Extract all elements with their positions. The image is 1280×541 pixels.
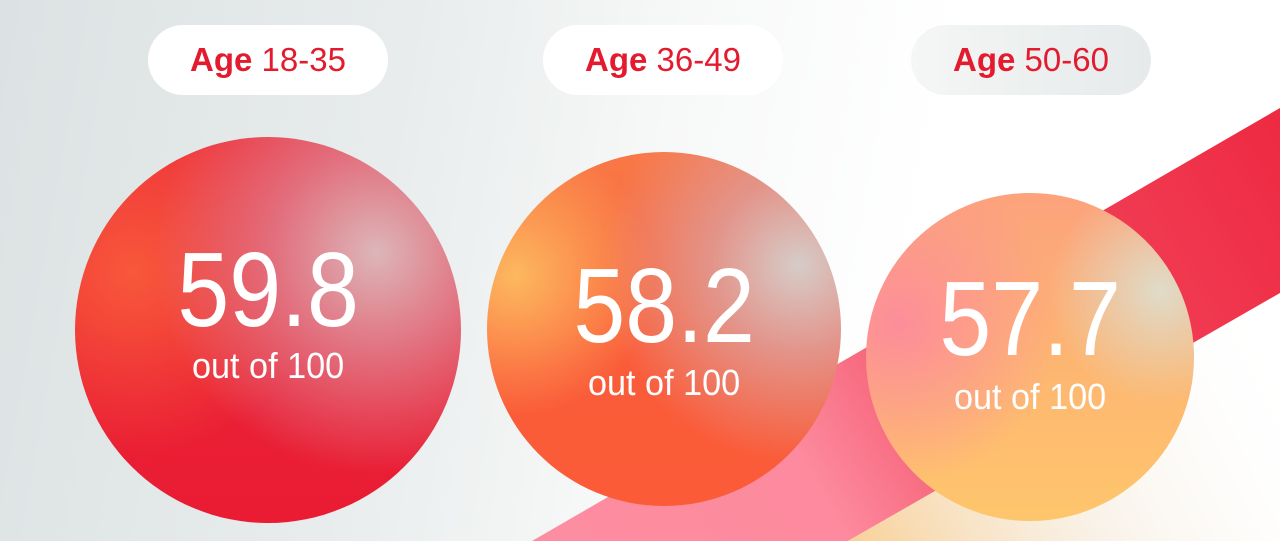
circle: 57.7 xyxy=(866,193,1194,521)
pill: Age 36-49: Age 36-49 xyxy=(585,41,741,78)
pill: Age 50-60 xyxy=(911,25,1151,95)
label out of 100: out of 100 xyxy=(192,345,344,386)
value 58.2: 58.2 xyxy=(573,247,755,365)
value 59.8: 59.8 xyxy=(177,231,359,349)
pill: Age 18-35: Age 18-35 xyxy=(190,41,346,78)
pill: Age 36-49 xyxy=(543,25,783,95)
pill: Age 18-35 xyxy=(148,25,388,95)
label out of 100: out of 100 xyxy=(954,376,1106,417)
circle: 58.2 xyxy=(487,152,841,506)
pill: Age 50-60: Age 50-60 xyxy=(953,41,1109,78)
label out of 100: out of 100 xyxy=(588,362,740,403)
circle: 59.8 xyxy=(75,137,461,523)
value 57.7: 57.7 xyxy=(939,260,1121,378)
